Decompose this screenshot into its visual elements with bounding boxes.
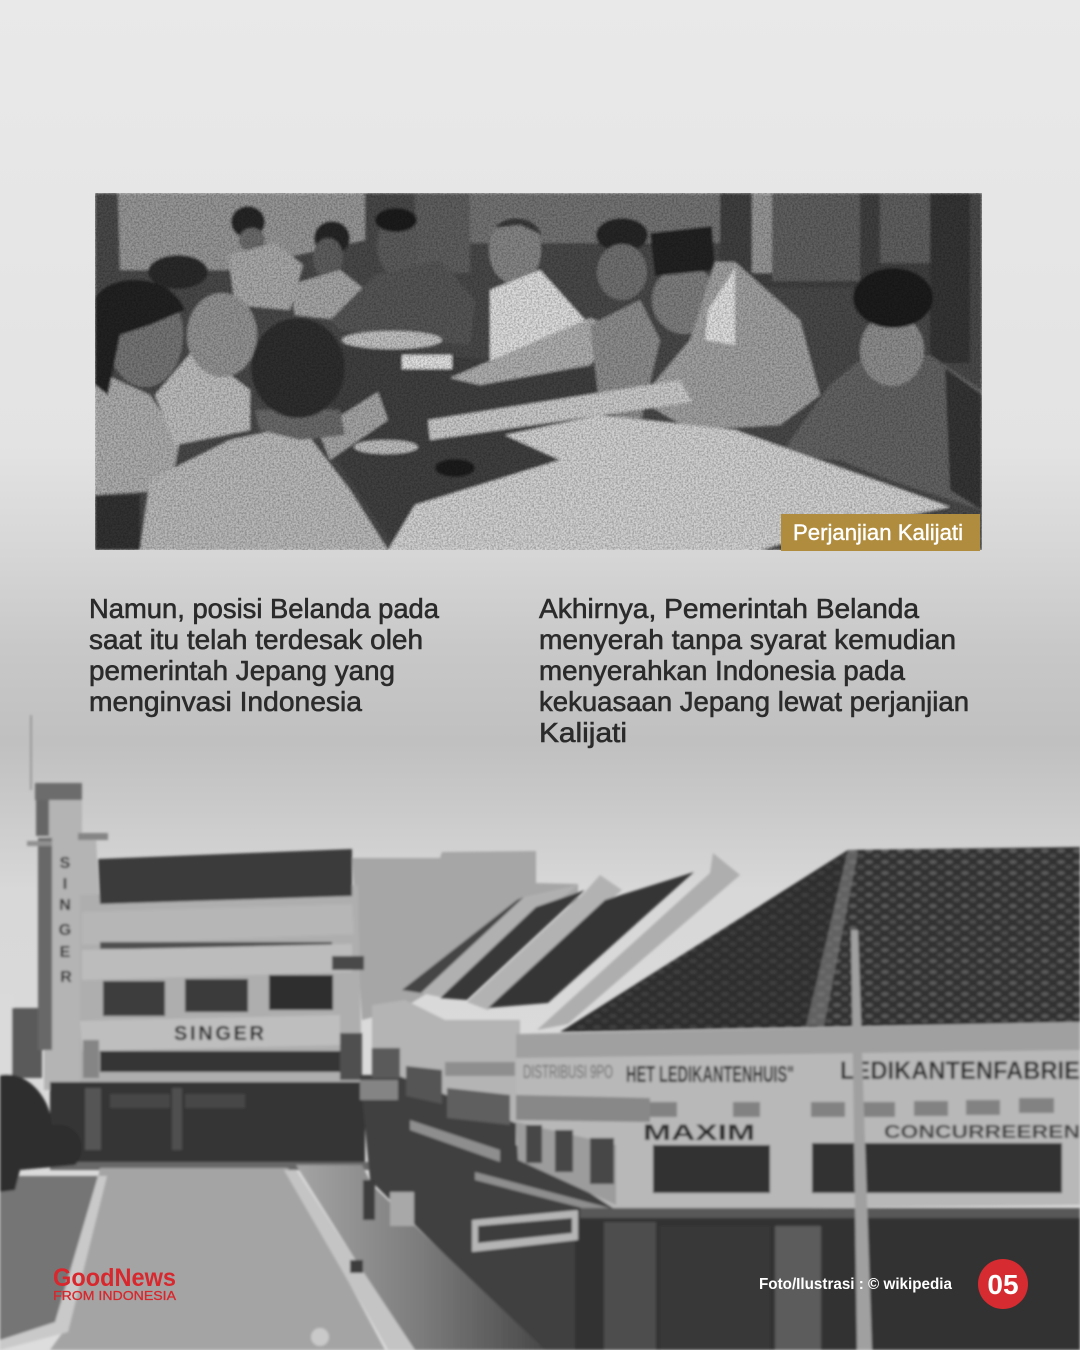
- man leaning with peci: [650, 270, 710, 336]
- logo: GoodNews from Indonesia: FROM INDONESIA: [53, 1288, 176, 1303]
- text block: right column: menyerahkan Indonesia pada: [539, 655, 905, 686]
- shop row with gables: [360, 847, 1080, 1350]
- text block: left column: [89, 593, 439, 717]
- officer with beret: [377, 226, 415, 272]
- caption: Perjanjian Kalijati: [781, 514, 980, 551]
- logo: GoodNews from Indonesia: [53, 1264, 176, 1303]
- antenna pole: [30, 715, 32, 790]
- page number badge: 05: [987, 1269, 1019, 1300]
- man rear two: [314, 221, 350, 255]
- background men: [228, 206, 982, 510]
- man standing rear: [231, 206, 265, 238]
- main tiled roof: [560, 847, 1080, 1032]
- small upper windows: [650, 1098, 1054, 1117]
- plaster wall: [118, 193, 365, 270]
- windows: [103, 981, 165, 1016]
- dark side wall: [360, 1075, 625, 1350]
- distant white building: [0, 995, 13, 1075]
- foreground tree: [0, 1074, 82, 1192]
- shop row with gables: MAXIM: [643, 1120, 755, 1145]
- side shop facades: [372, 1000, 520, 1125]
- corner facade: [516, 1022, 1080, 1210]
- man from behind: [140, 425, 388, 550]
- older man: [155, 348, 250, 445]
- sign: SINGER vertical: N: [59, 897, 71, 914]
- spread map: [388, 415, 950, 550]
- street: [0, 1165, 545, 1350]
- text block: left column: menginvasi Indonesia: [89, 686, 362, 717]
- window grille and wall panels: [415, 193, 470, 273]
- page number badge: [978, 1259, 1028, 1309]
- distant trees: [12, 1008, 42, 1078]
- gable roofs: [402, 897, 524, 993]
- logo: GoodNews from Indonesia: GoodNews: [53, 1264, 176, 1292]
- sidewalk: [296, 1165, 545, 1350]
- sign: SINGER vertical: E: [60, 944, 71, 961]
- text block: left column: saat itu telah terdesak oleh: [89, 624, 423, 655]
- photo credit: Foto/Ilustrasi : © wikipedia: [759, 1276, 952, 1293]
- lawn curb: [0, 1176, 107, 1350]
- ground floor dark: [575, 1208, 1080, 1350]
- awning: [332, 956, 364, 970]
- road curb: [284, 1170, 415, 1350]
- sign: SINGER vertical: S: [60, 855, 71, 872]
- sign: SINGER vertical: G: [59, 922, 71, 939]
- large windows: [653, 1145, 770, 1193]
- main wall: [80, 885, 362, 1085]
- grey haired man: [489, 216, 541, 284]
- sign: SINGER vertical: R: [60, 969, 72, 986]
- upper band: [82, 904, 354, 945]
- text block: right column: Akhirnya, Pemerintah Belanda: [539, 593, 919, 624]
- foreground men: [95, 255, 388, 550]
- text block: left column: pemerintah Jepang yang: [89, 655, 395, 686]
- sign: SINGER vertical: [59, 855, 72, 986]
- middle band: [82, 944, 352, 980]
- meeting photo: [95, 193, 982, 550]
- man with dark cap: [596, 218, 648, 252]
- Singer sign band: [80, 1015, 340, 1051]
- text block: left column: Namun, posisi Belanda pada: [89, 593, 439, 624]
- lawn: [0, 1176, 102, 1345]
- road: [50, 1168, 385, 1350]
- lower windows: [100, 1051, 340, 1072]
- text block: right column: menyerah tanpa syarat kemudian: [539, 624, 956, 655]
- man in rear left: [148, 255, 208, 289]
- ground floor: [50, 1082, 365, 1162]
- photo grain: [95, 193, 982, 550]
- caption: Perjanjian Kalijati: Perjanjian Kalijati: [793, 520, 963, 545]
- sign: SINGER horizontal: SINGER: [174, 1023, 265, 1045]
- sign: SINGER vertical: I: [63, 876, 67, 893]
- man far left: [95, 370, 180, 495]
- dark floor left: [95, 495, 140, 550]
- hanging sign: [472, 1210, 578, 1252]
- papers and ink pot: [342, 331, 442, 349]
- small windows strip: [100, 942, 332, 949]
- rolled maps: [428, 380, 692, 440]
- shop signs: HET LEDIKANTENHUIS": [626, 1061, 794, 1087]
- tower: [44, 798, 108, 1090]
- young man with beret: [780, 355, 982, 510]
- text block: right column: [539, 593, 969, 748]
- text block: right column: kekuasaan Jepang lewat perjanjian: [539, 686, 969, 717]
- dark roof: [98, 849, 352, 904]
- rear wall: [352, 851, 578, 1020]
- pedestrians: [390, 1192, 414, 1226]
- Singer building: [27, 783, 370, 1170]
- background photo: street with shops: [0, 715, 1080, 1350]
- room background: [95, 193, 982, 550]
- text block: right column: Kalijati: [539, 717, 627, 748]
- shop row with gables: DISTRIBUSI 9PO: [523, 1062, 613, 1082]
- utility pole: [851, 930, 872, 1350]
- shop row with gables: CONCURREEREN: [884, 1122, 1080, 1142]
- table: [334, 347, 595, 539]
